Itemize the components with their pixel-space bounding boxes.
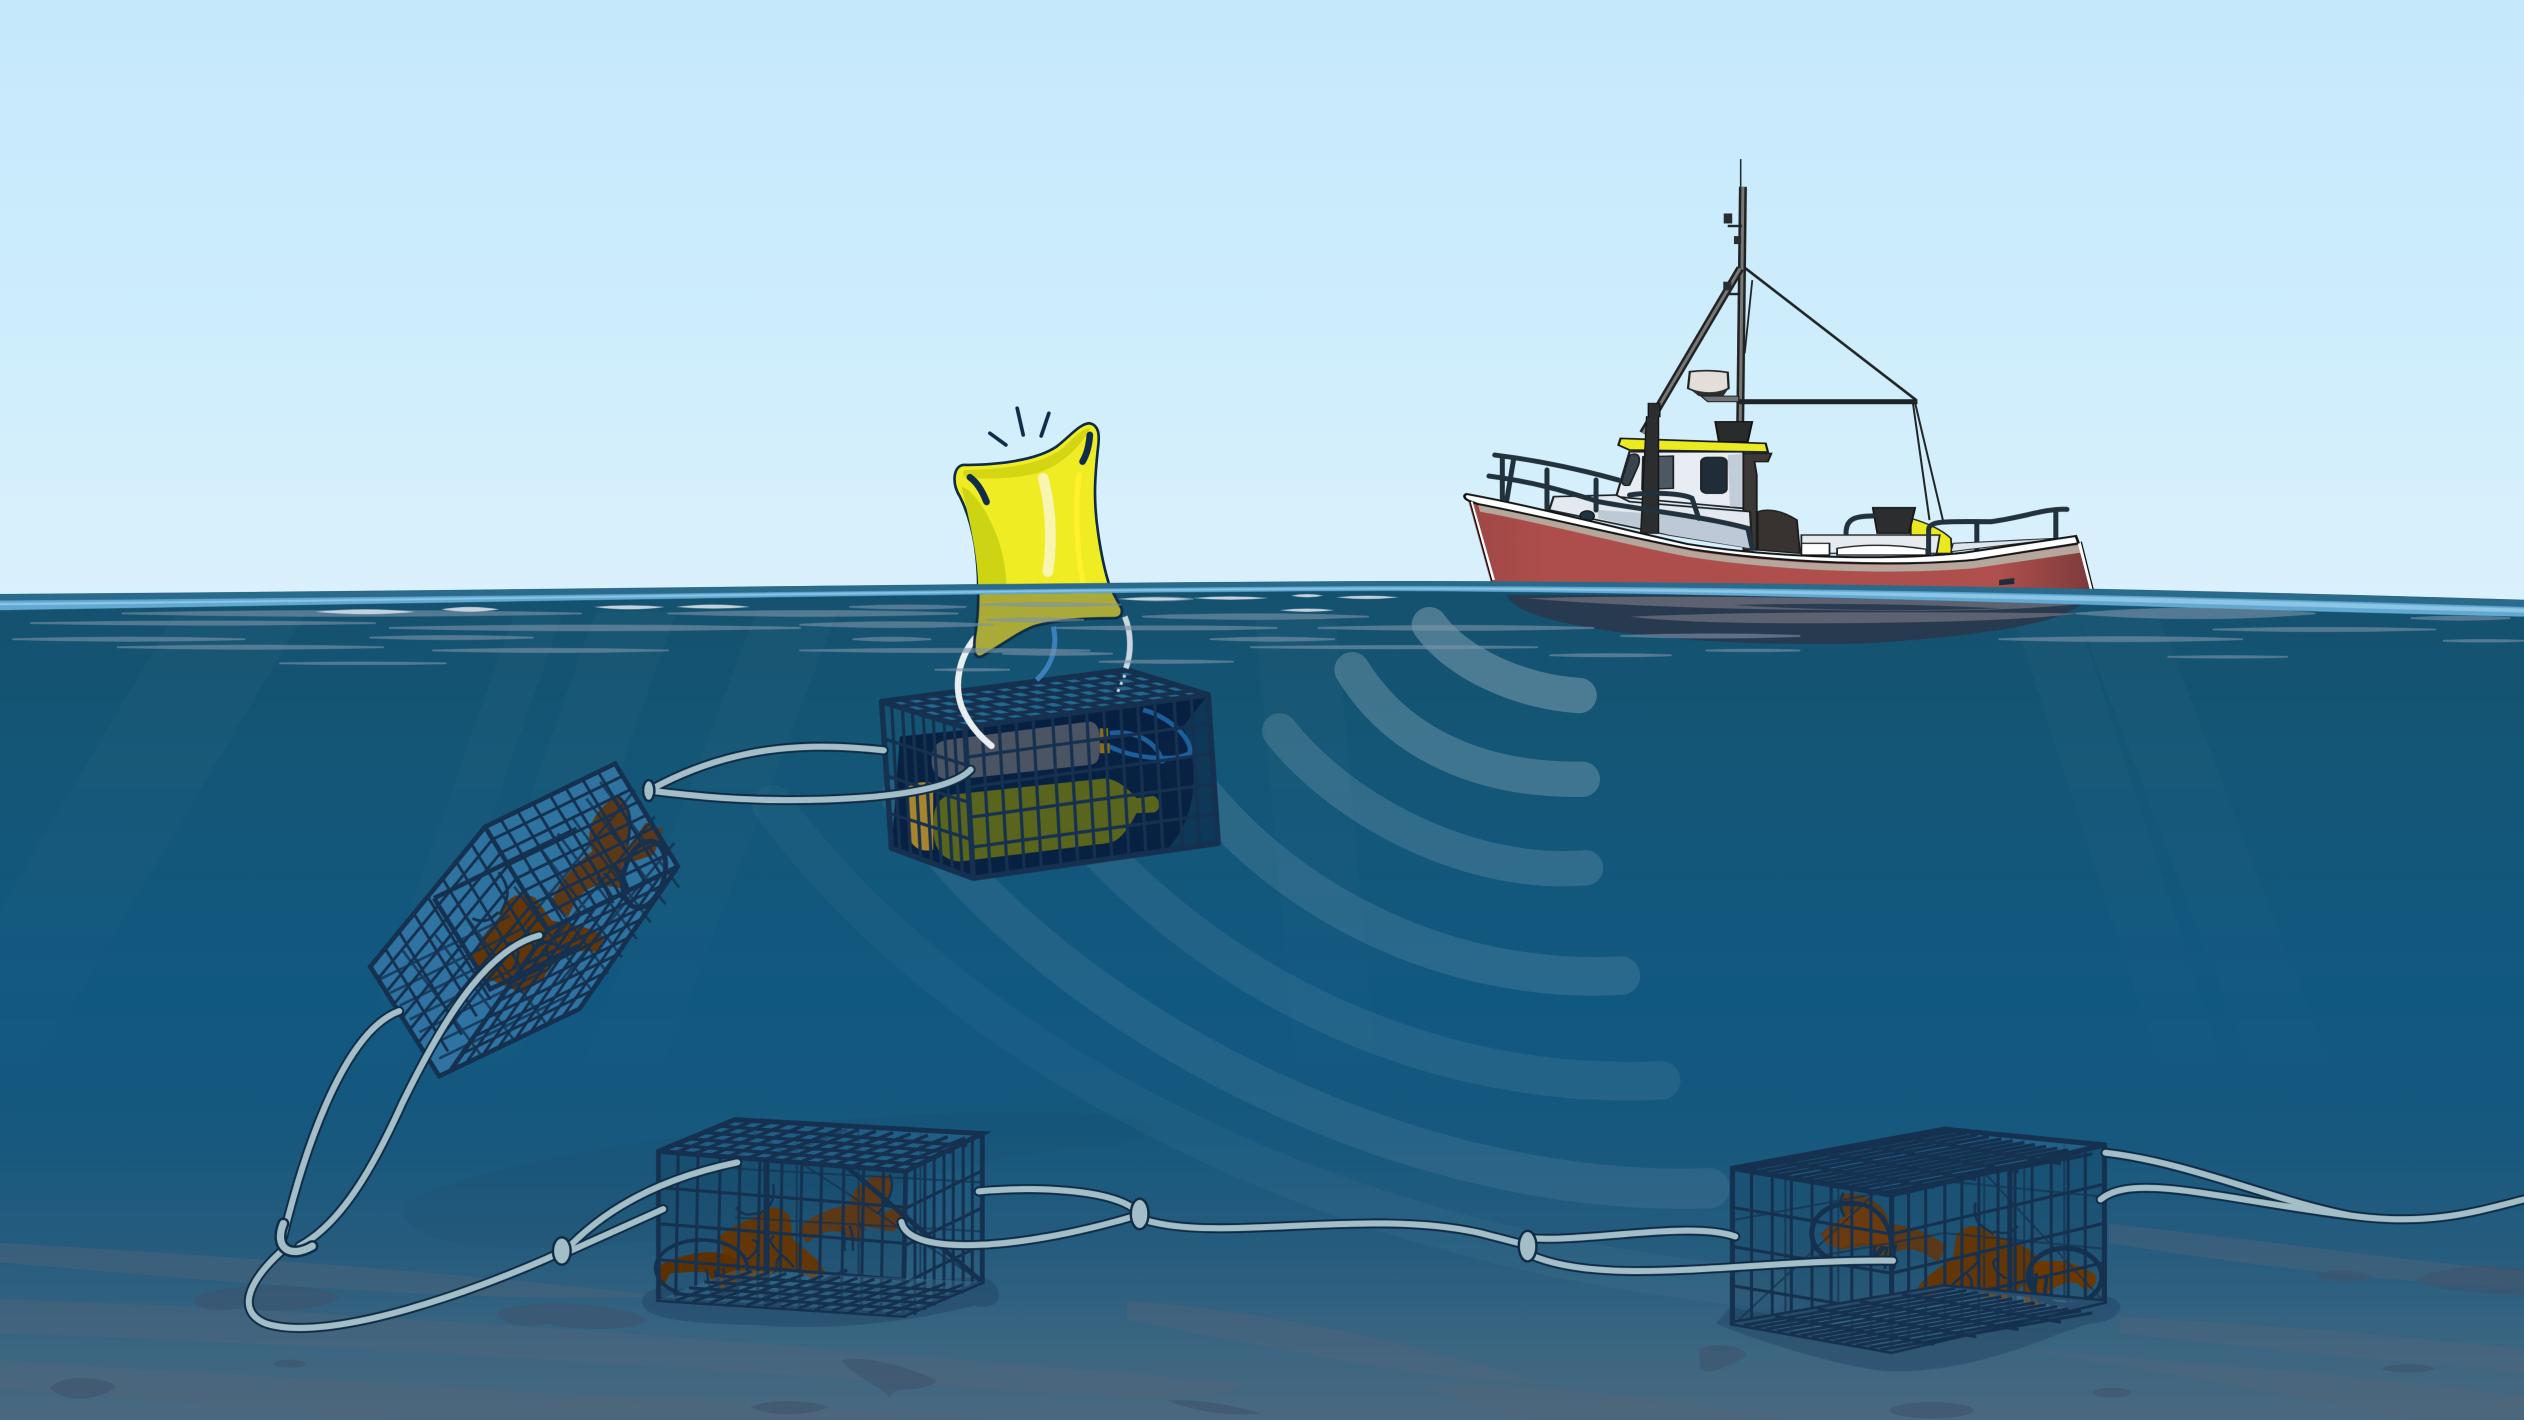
buoy blue line (1037, 627, 1055, 680)
buoy (955, 423, 1122, 657)
lobsters (720, 1175, 910, 1282)
cockpit post (1641, 403, 1660, 533)
blue hoses (1110, 710, 1190, 763)
grey buoy tank (932, 722, 1100, 780)
light rays in water (0, 612, 2366, 1159)
front lobster (656, 1240, 748, 1297)
sound wave arcs from boat to buoy (773, 625, 1771, 1288)
ropes connecting traps (249, 747, 2524, 1328)
fishing boat (1464, 159, 2093, 644)
boat reflection (1507, 595, 2087, 644)
surface glints (316, 594, 1399, 614)
funnel (1715, 422, 1752, 442)
buoy shading (963, 428, 1090, 478)
cage body tint (370, 764, 678, 1076)
cage tint (658, 1120, 982, 1316)
hull port mark (1999, 578, 2014, 585)
trap shadows on seabed (404, 1111, 2120, 1372)
hull stripe (1478, 503, 2080, 572)
white gunwale (1464, 494, 2079, 563)
cage lines (1732, 1129, 2104, 1352)
buoy highlight (1043, 478, 1050, 572)
buoy tether right (1125, 617, 1130, 668)
rope knots (280, 780, 1536, 1265)
cage lines (656, 1120, 982, 1319)
trap 4: tank release cage (882, 408, 1218, 878)
cage lobsters in rings (1812, 1203, 2102, 1310)
rails (1489, 455, 2067, 553)
lobster (1820, 1193, 2036, 1300)
arc 3 (1280, 731, 1586, 869)
surface band (0, 581, 2524, 617)
arc 2 (1352, 670, 1582, 779)
lobster (437, 785, 700, 1007)
cabin (1616, 452, 1743, 508)
orange tank (908, 782, 933, 851)
surface ripples (13, 597, 2524, 671)
trap 2: seabed cage with lobsters (656, 1120, 982, 1319)
cage tint (1732, 1129, 2104, 1352)
deck right (1951, 537, 2076, 552)
buoy grips (970, 477, 987, 502)
deck housing (1549, 495, 1752, 548)
trap 3: seabed cage with lobsters right (1732, 1129, 2104, 1352)
buoy tether left (958, 638, 992, 746)
bucket (1873, 508, 1915, 533)
windows (1701, 457, 1727, 493)
arc 6 (901, 797, 1709, 1189)
cage grid (882, 670, 1218, 878)
dark superstructure (1743, 453, 1771, 550)
arc 7 (773, 805, 1771, 1288)
rope outlines (249, 747, 2524, 1328)
ocean water body (0, 581, 2524, 1420)
yellow float (1911, 518, 1952, 553)
escape ring (617, 839, 672, 910)
aft deck gear (1801, 535, 1940, 553)
seabed bands and blotches (0, 1224, 2524, 1420)
arc 4 (1175, 757, 1621, 976)
radar (1688, 371, 1729, 393)
arc 5 (1046, 789, 1661, 1081)
mast and rigging (1643, 159, 1943, 520)
cage lines (370, 764, 694, 1076)
hull (1467, 495, 2092, 593)
cage roof (882, 670, 1208, 727)
olive tank (933, 778, 1159, 862)
rope fill (249, 747, 2524, 1328)
alert marks (990, 408, 1049, 445)
sky (0, 0, 2524, 620)
roof (1618, 438, 1768, 452)
trap 1: tilted rising cage (370, 764, 700, 1076)
arc 1 (1429, 625, 1579, 696)
cage interior (892, 695, 1218, 878)
